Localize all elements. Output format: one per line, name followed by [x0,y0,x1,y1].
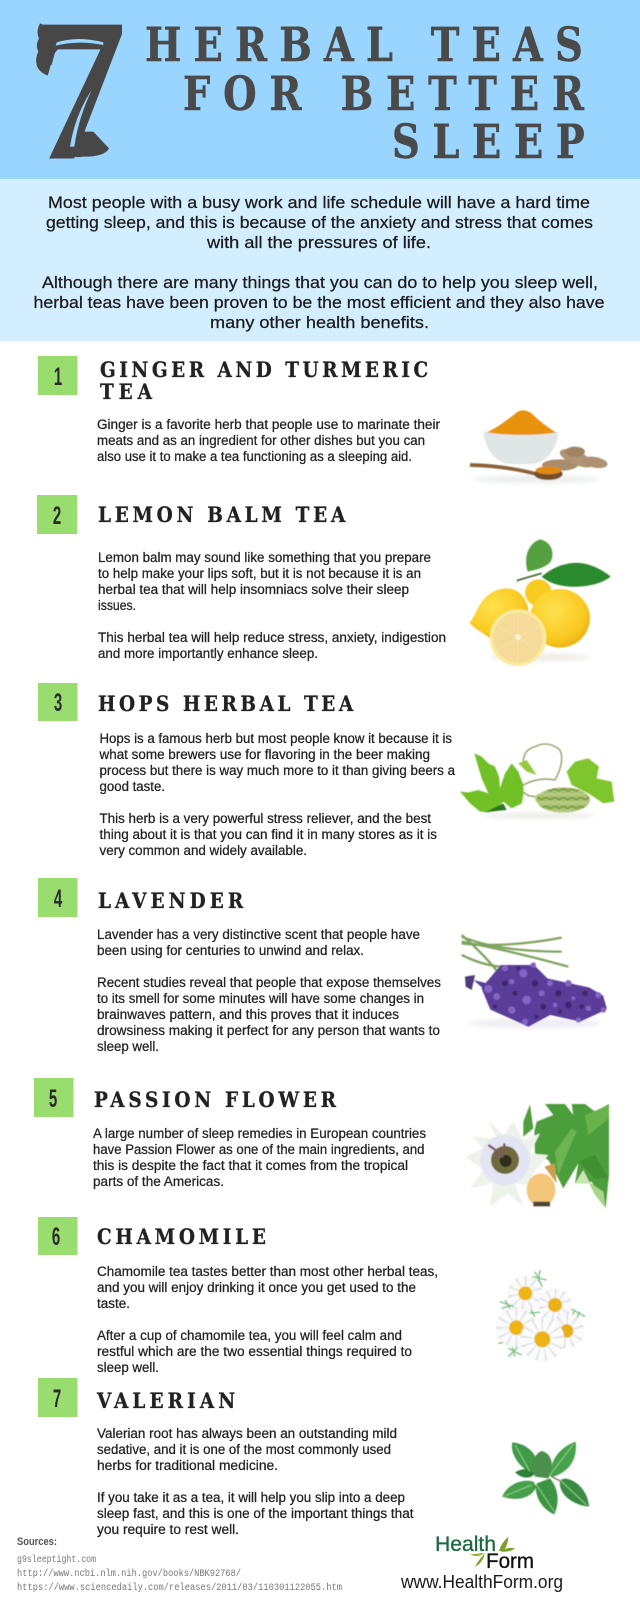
body text 3: Hops is a famous herb but most people know it because it is [100,731,452,746]
panel: valerian [38,1378,589,1537]
sources block: https://www.sciencedaily.com/releases/2011/03/110301122055.htm [17,1582,342,1594]
title [145,18,585,170]
body text 7 [97,1426,414,1537]
number badge 3 [38,683,78,721]
body text 5 [93,1126,426,1189]
icon: passion flower [465,1104,609,1208]
number badge 5: 5 [49,1085,57,1113]
body text 5: parts of the Americas. [93,1174,224,1189]
body text 1: meats and as an ingredient for other dishes but you can [97,433,425,448]
number badge 6: 6 [52,1223,60,1251]
number badge 1: 1 [54,363,62,391]
number badge 2: 2 [53,502,61,530]
number badge 7 [38,1378,78,1417]
body text 2: This herbal tea will help reduce stress, anxiety, indigestion [98,630,446,645]
body text 2: to help make your lips soft, but it is not because it is an [98,566,421,581]
number badge 2 [37,495,77,534]
body text 5: this is despite the fact that it comes from the tropical [93,1158,408,1173]
icon: chamomile [496,1270,585,1361]
body text 4 [97,927,441,1054]
panel: lavender [38,878,606,1054]
body text 4: sleep well. [97,1039,159,1054]
sources block: Sources: [17,1536,57,1548]
body text 1: also use it to make a tea functioning as a sleeping aid. [97,449,412,464]
logo: HealthForm: Health [435,1533,496,1556]
body text 1: Ginger is a favorite herb that people use to marinate their [97,417,440,432]
body text 4: brainwaves pattern, and this proves that it induces [97,1007,399,1022]
body text 2: and more importantly enhance sleep. [98,646,318,661]
body text 7: sedative, and it is one of the most commonly used [97,1442,391,1457]
body text 7: you require to rest well. [97,1522,239,1537]
number badge 4: 4 [54,885,63,913]
icon: logo leaves [470,1537,515,1567]
body text 1 [97,417,440,464]
body text 3: thing about it is that you can find it in many stores as it is [100,827,437,842]
icon: lemons [469,539,611,666]
body text 5: have Passion Flower as one of the main ingredients, and [93,1142,424,1157]
sources block: g9sleeptight.com [17,1554,96,1566]
logo: HealthForm [400,1533,563,1592]
body text 3 [99,731,455,858]
body text 7: Valerian root has always been an outstanding mild [97,1426,397,1441]
body text 3: very common and widely available. [100,843,307,858]
body text 4: Recent studies reveal that people that expose themselves [97,975,441,990]
intro text: herbal teas have been proven to be the most efficient and they also have [34,293,604,312]
panel: passion flower [34,1078,609,1208]
body text 6: After a cup of chamomile tea, you will feel calm and [97,1328,402,1343]
heading 6: CHAMOMILE [97,1224,266,1249]
body text 6: restful which are the two essential things required to [97,1344,412,1359]
body text 4: to its smell for some minutes will have some changes in [97,991,424,1006]
body text 2: herbal tea that will help insomniacs solve their sleep [98,582,409,597]
title: HERBAL TEAS [145,18,583,73]
body text 6: and you will enjoy drinking it once you get used to the [97,1280,416,1295]
body text 3: This herb is a very powerful stress reliever, and the best [100,811,431,826]
panel: lemon balm tea [37,495,611,666]
body text 4: been using for centuries to unwind and relax. [97,943,364,958]
body text 5: A large number of sleep remedies in European countries [93,1126,426,1141]
intro text [34,193,604,332]
body text 3: what some brewers use for flavoring in the beer making [99,747,430,762]
number badge 7: 7 [53,1385,61,1413]
header banner [0,0,640,200]
body text 3: good taste. [100,779,165,794]
number badge 6 [38,1217,78,1255]
intro panel [0,179,640,341]
heading 1: GINGER AND TURMERIC [100,357,428,382]
number badge 1 [38,356,78,395]
icon: turmeric bowl and ginger [470,410,608,483]
body text 7: sleep fast, and this is one of the important things that [97,1506,414,1521]
icon: lavender [462,935,606,1028]
body text 7: If you take it as a tea, it will help you slip into a deep [97,1490,405,1505]
panel: ginger and turmeric tea [38,356,608,483]
intro text: getting sleep, and this is because of the anxiety and stress that comes [46,213,593,232]
number badge 3: 3 [54,689,62,717]
body text 6: Chamomile tea tastes better than most other herbal teas, [97,1264,438,1279]
body text 7: herbs for traditional medicine. [97,1458,278,1473]
panel: chamomile [38,1217,585,1375]
panel: hops herbal tea [38,683,614,858]
icon: hops [460,744,614,819]
heading 1 [100,357,428,404]
heading 4: LAVENDER [98,888,244,913]
body text 6: taste. [97,1296,130,1311]
heading 1: TEA [100,379,153,404]
intro text: with all the pressures of life. [206,233,431,252]
body text 4: Lavender has a very distinctive scent that people have [97,927,420,942]
heading 5: PASSION FLOWER [94,1087,337,1112]
number badge 5 [34,1078,74,1117]
intro text: Although there are many things that you can do to help you sleep well, [42,273,598,292]
title: FOR BETTER [183,67,584,122]
intro text: Most people with a busy work and life schedule will have a hard time [48,193,590,212]
body text 2: Lemon balm may sound like something that you prepare [98,550,431,565]
logo: HealthForm: Form [486,1550,534,1573]
intro text: many other health benefits. [210,313,429,332]
heading 2: LEMON BALM TEA [98,502,346,527]
title: SLEEP [392,115,585,170]
sources block [17,1536,342,1594]
body text 2: issues. [98,598,136,613]
number badge 4 [38,878,78,917]
heading 3: HOPS HERBAL TEA [98,691,354,716]
heading 7: VALERIAN [96,1388,235,1413]
body text 6: sleep well. [97,1360,159,1375]
body text 4: drowsiness making it perfect for any person that wants to [97,1023,440,1038]
icon: mint leaves [502,1442,589,1514]
body text 6 [97,1264,438,1375]
logo: HealthForm: www.HealthForm.org [400,1572,563,1592]
body text 2 [98,550,446,661]
sources block: http://www.ncbi.nlm.nih.gov/books/NBK92768/ [17,1568,241,1580]
body text 3: process but there is way much more to it than giving beers a [100,763,455,778]
